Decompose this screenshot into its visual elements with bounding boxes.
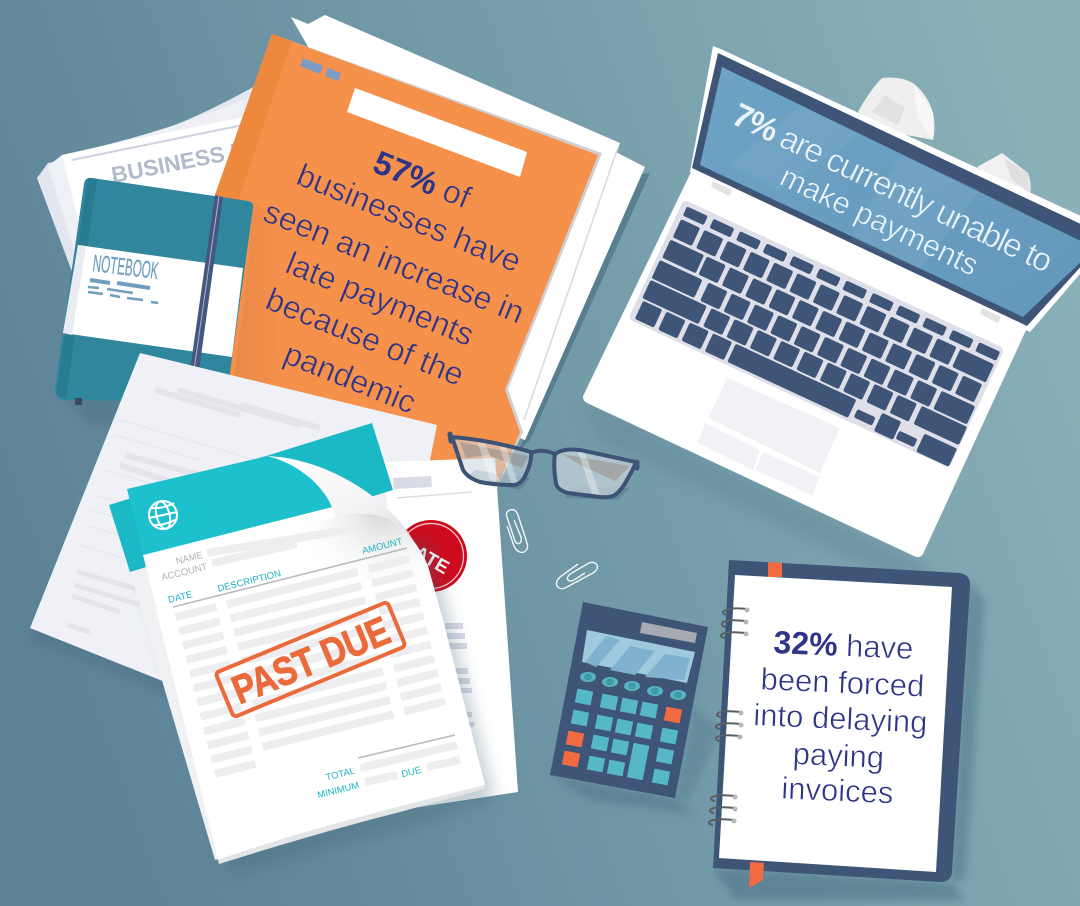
- past due invoice: [109, 423, 495, 875]
- trackpad: [698, 378, 840, 495]
- keyboard: [628, 199, 1005, 468]
- text: 57% stat: pandemic: [279, 335, 421, 420]
- text: 7% stat: 7% are currently unable to: [727, 96, 1059, 280]
- past due stamp: PAST DUE: [226, 609, 396, 713]
- text: 57% stat: 57% of: [368, 143, 476, 216]
- icon: paper clips: [506, 510, 598, 589]
- calculator: [550, 602, 720, 815]
- invoice labels: ACCOUNT: [160, 562, 209, 584]
- text: 32% stat: 32% have: [773, 624, 914, 666]
- invoice labels: DESCRIPTION: [217, 568, 282, 595]
- sheet bars: [393, 476, 474, 727]
- invoice labels: DATE: [167, 589, 194, 606]
- document text lines: [68, 390, 320, 632]
- notebook page: [719, 575, 952, 872]
- invoice labels: DUE: [400, 765, 422, 780]
- calculator display: [582, 630, 695, 683]
- text: 32% stat: paying: [792, 736, 885, 775]
- text: 57% stat: because of the: [261, 281, 469, 393]
- icon: globe: [149, 500, 177, 530]
- notebook text lines: [88, 280, 158, 303]
- text: 57% stat: businesses have: [292, 156, 526, 279]
- large grey document: [30, 353, 437, 700]
- red late stamp: LATE: [400, 537, 452, 579]
- laptop hinges: [711, 181, 732, 196]
- crumpled paper balls: [858, 78, 1031, 193]
- late-notice sheet with red stamp: [385, 458, 518, 810]
- text: 32% stat: [753, 624, 928, 810]
- red ribbon bottom: [749, 862, 764, 888]
- white papers behind folder: [291, 15, 650, 452]
- invoice labels: AMOUNT: [361, 536, 404, 557]
- invoice labels: NAME: [175, 550, 204, 567]
- newspaper headline: BUSINESS N: [109, 137, 249, 188]
- invoice labels: [160, 536, 422, 801]
- laptop base: [583, 170, 1027, 557]
- calculator keys: [562, 689, 682, 785]
- invoice labels: MINIMUM: [316, 780, 361, 801]
- notebook cover: [713, 560, 970, 882]
- folder tabs: [300, 58, 341, 81]
- invoice grey table bars: [175, 555, 450, 778]
- page curl: [267, 456, 413, 540]
- icon: glasses: [450, 434, 637, 500]
- text: 32% stat: been forced: [760, 661, 925, 704]
- red late stamp: [395, 520, 467, 592]
- teal notebook: [55, 178, 253, 430]
- newspaper stack: [37, 85, 257, 320]
- notebook elastic band: [188, 195, 223, 385]
- text: 57% stat: late payments: [281, 245, 479, 353]
- calculator round buttons: [580, 672, 686, 700]
- spiral notebook: [709, 560, 985, 900]
- front invoice page: [143, 507, 485, 860]
- orange folder: [215, 34, 602, 497]
- rear teal invoice sheet: [109, 423, 400, 860]
- invoice header bars and rules: [173, 530, 460, 782]
- calculator solar panel: [640, 622, 697, 643]
- invoice labels: TOTAL: [325, 766, 356, 784]
- laptop: [582, 46, 1080, 600]
- red ribbon top: [768, 562, 782, 577]
- laptop screen lid: [690, 46, 1080, 332]
- spiral rings: [709, 608, 747, 825]
- folder white label: [347, 88, 527, 177]
- text: 57% stat: [259, 143, 530, 420]
- text: 7% stat: make payments: [775, 159, 984, 283]
- text: 32% stat: invoices: [781, 771, 894, 810]
- text: 57% stat: seen an increase in: [259, 193, 530, 330]
- teal notebook: NOTEBOOK: [91, 250, 160, 285]
- text: 32% stat: into delaying: [753, 697, 928, 740]
- invoice teal header: [127, 456, 332, 555]
